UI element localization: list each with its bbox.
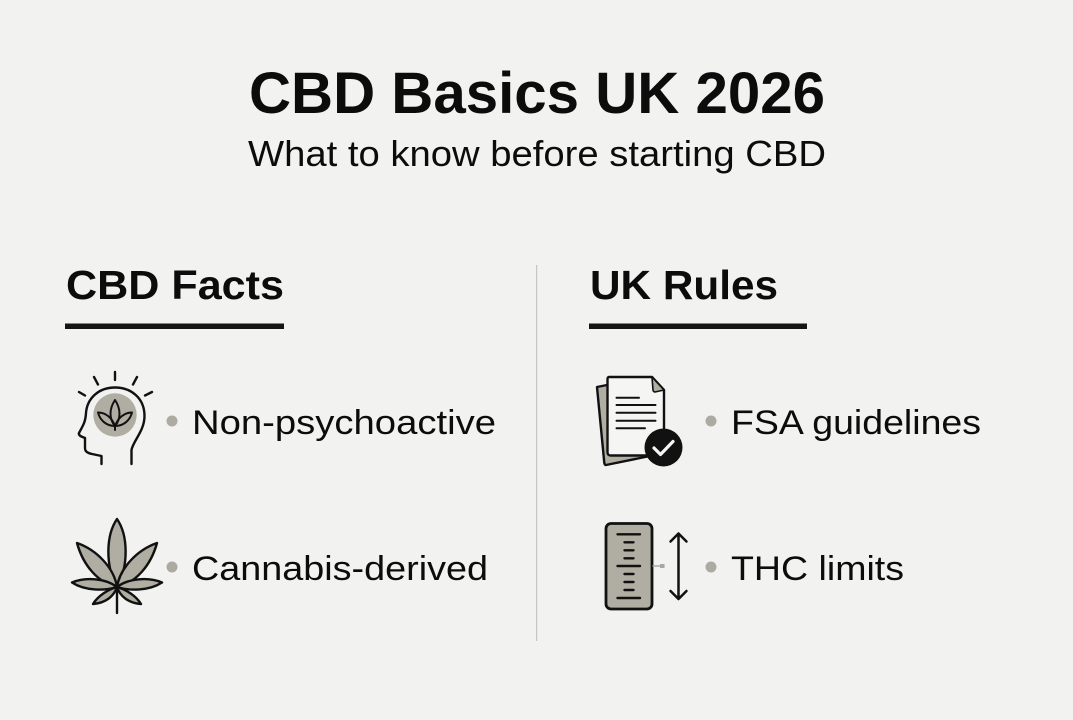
bullet (706, 416, 716, 426)
icon: cannabis leaf (72, 519, 162, 613)
panel: UK Rules (589, 262, 981, 609)
column divider (536, 265, 537, 641)
icon: head with leaf (79, 372, 152, 464)
label: Non-psychoactive: Non-psychoactive (192, 404, 496, 442)
label: Cannabis-derived: Cannabis-derived (192, 550, 488, 588)
icon: measuring scale with arrow (606, 524, 686, 609)
title: CBD Basics UK 2026 (249, 61, 825, 126)
subtitle: What to know before starting CBD (248, 133, 826, 174)
label: THC limits: THC limits (731, 550, 904, 588)
panel: CBD Facts (65, 262, 496, 613)
bullet (166, 562, 178, 572)
icon: document with check (597, 377, 682, 466)
label: FSA guidelines: FSA guidelines (731, 404, 981, 442)
bullet (166, 416, 178, 426)
heading underline (589, 324, 807, 329)
heading underline (65, 324, 284, 329)
heading: CBD Facts: CBD Facts (66, 262, 284, 308)
heading: UK Rules: UK Rules (590, 262, 778, 308)
bullet (706, 562, 716, 572)
